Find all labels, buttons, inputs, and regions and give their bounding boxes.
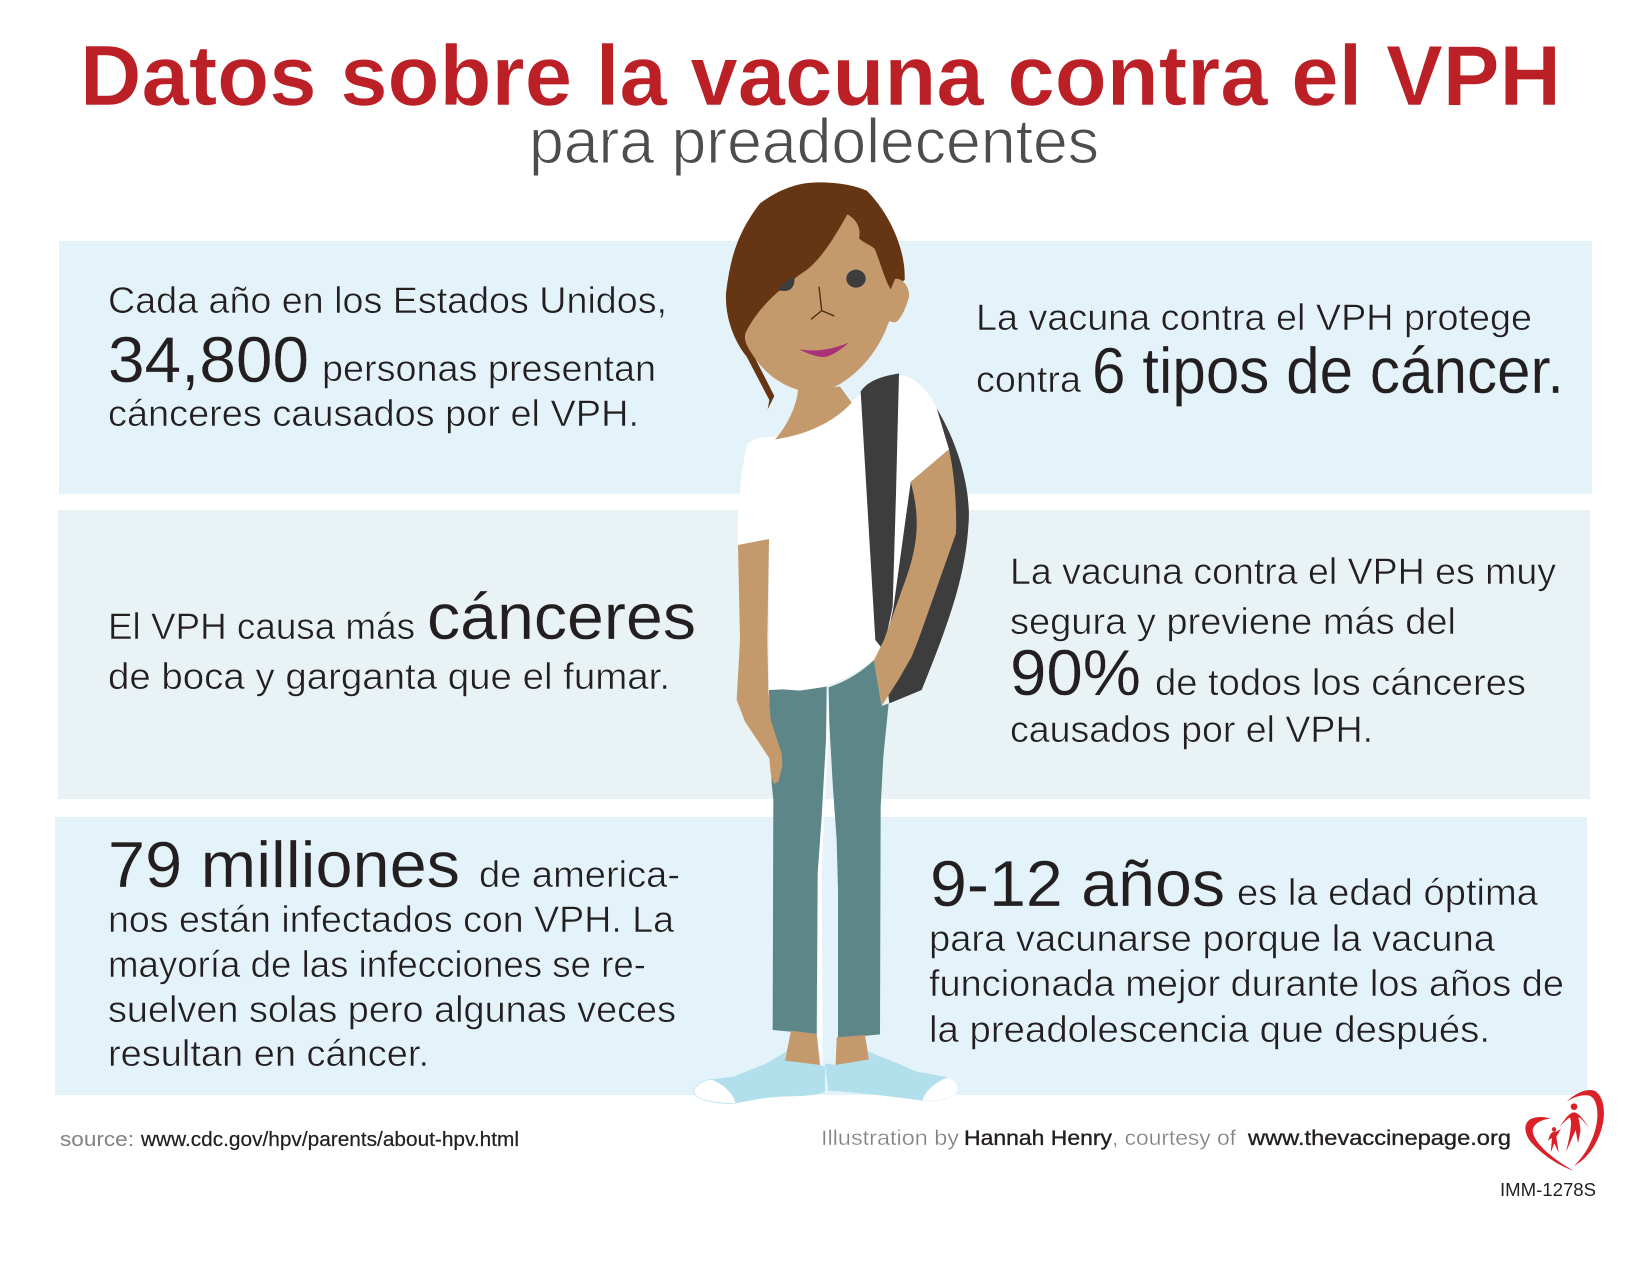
text block: 34,800 cases: personas presentan: [322, 348, 656, 389]
backpack strap: [861, 373, 899, 650]
text block: more mouth and throat cancers: [108, 580, 696, 697]
face: [745, 214, 893, 391]
text block: 79 million infected: de america-: [479, 854, 680, 895]
document code: IMM-1278S: [1500, 1180, 1596, 1200]
text block: 79 million infected: nos están infectados con VPH. La: [108, 899, 674, 940]
illustration credit: www.thevaccinepage.org: [1247, 1127, 1511, 1150]
text block: optimal age 9-12: 9-12 años: [930, 847, 1225, 920]
text block: 34,800 cases: 34,800: [108, 323, 309, 396]
right toe: [923, 1077, 958, 1101]
text block: optimal age 9-12: para vacunarse porque la vacuna: [929, 918, 1495, 959]
nose: [811, 287, 834, 319]
left eye: [778, 277, 794, 291]
left toe: [694, 1079, 736, 1103]
backpack body: [883, 408, 969, 703]
source line: www.cdc.gov/hpv/parents/about-hpv.html: [140, 1129, 519, 1151]
left shoe: [712, 1052, 825, 1103]
left arm: [737, 539, 782, 784]
illustration credit: [821, 1127, 1511, 1150]
text block: 79 million infected: suelven solas pero algunas veces: [108, 989, 676, 1030]
text block: safe and prevents 90%: causados por el VPH.: [1010, 709, 1373, 750]
text block: optimal age 9-12: la preadolescencia que después.: [929, 1009, 1490, 1050]
text block: safe and prevents 90%: [1010, 551, 1556, 750]
text block: more mouth and throat cancers: El VPH causa más: [108, 606, 415, 647]
right arm: [874, 449, 956, 706]
ankles: [785, 1031, 869, 1065]
shirt: [738, 375, 949, 690]
panel: row 3 background: [55, 817, 1587, 1095]
illustration credit: Illustration by: [821, 1127, 960, 1150]
hair: [726, 182, 905, 409]
inner gap between the legs: [818, 688, 829, 1065]
text block: protects against 6 cancers: 6 tipos de cáncer.: [1092, 334, 1564, 407]
text block: optimal age 9-12: [929, 847, 1564, 1050]
neck: [775, 387, 852, 439]
text block: 79 million infected: mayoría de las infecciones se re-: [108, 944, 646, 985]
text block: safe and prevents 90%: segura y previene más del: [1010, 601, 1456, 642]
text block: 79 million infected: resultan en cáncer.: [108, 1033, 429, 1074]
trousers: [769, 687, 827, 1034]
panel: row 1 background: [59, 241, 1592, 494]
text block: more mouth and throat cancers: de boca y garganta que el fumar.: [108, 656, 670, 697]
mouth: [799, 342, 849, 357]
icon: heart logo with parent and child: [1525, 1090, 1604, 1171]
subtitle: para preadolecentes: [529, 107, 1099, 177]
text block: optimal age 9-12: funcionada mejor durante los años de: [929, 963, 1564, 1004]
panel: row 2 background: [58, 510, 1590, 799]
text block: 79 million infected: 79 milliones: [108, 828, 460, 901]
text block: protects against 6 cancers: La vacuna contra el VPH protege: [976, 297, 1532, 338]
source line: source:: [60, 1129, 134, 1151]
right shoe: [825, 1052, 948, 1101]
text block: protects against 6 cancers: contra: [976, 359, 1081, 400]
text block: safe and prevents 90%: 90%: [1010, 636, 1141, 709]
illustration credit: , courtesy of: [1112, 1127, 1236, 1150]
right eye: [846, 270, 866, 288]
text block: protects against 6 cancers: [976, 297, 1564, 407]
illustration credit: Hannah Henry: [964, 1127, 1113, 1150]
text block: optimal age 9-12: es la edad óptima: [1237, 872, 1538, 913]
text block: 34,800 cases: cánceres causados por el VPH.: [108, 393, 639, 434]
text block: safe and prevents 90%: La vacuna contra el VPH es muy: [1010, 551, 1556, 592]
text block: more mouth and throat cancers: cánceres: [427, 580, 696, 653]
ear: [887, 279, 909, 322]
text block: 34,800 cases: [108, 280, 667, 434]
text block: 34,800 cases: Cada año en los Estados Unidos,: [108, 280, 667, 321]
text block: 79 million infected: [108, 828, 680, 1074]
text block: safe and prevents 90%: de todos los cánceres: [1155, 662, 1526, 703]
illustration: preteen with backpack: [694, 182, 969, 1103]
title: Datos sobre la vacuna contra el VPH: [80, 29, 1561, 124]
